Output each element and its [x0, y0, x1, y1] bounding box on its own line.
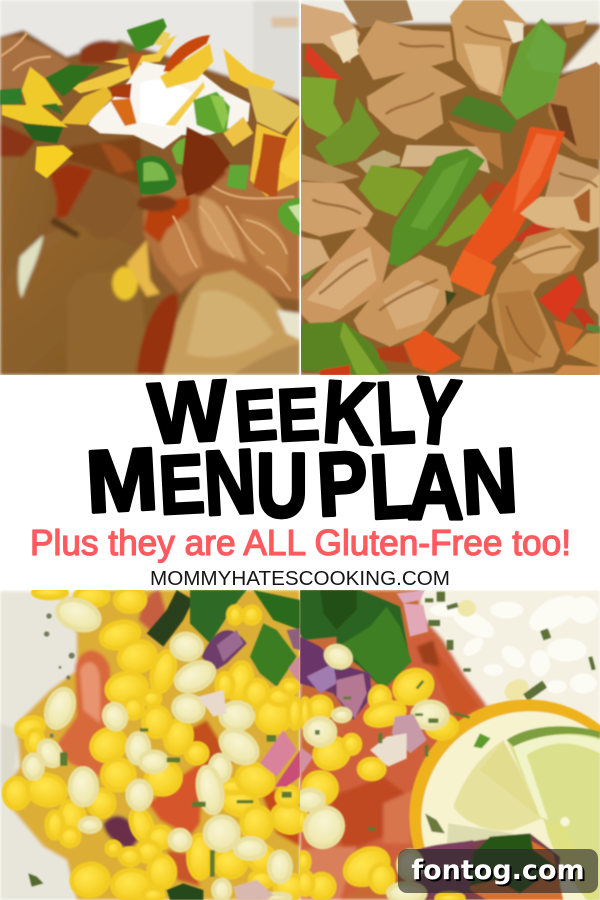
title: weekly menu plan: E	[275, 372, 321, 457]
title: weekly menu plan: U	[256, 436, 308, 536]
title: weekly menu plan: L	[374, 364, 417, 464]
photo: chicken fajitas with peppers	[300, 0, 600, 375]
title: weekly menu plan: E	[156, 438, 207, 533]
title: weekly menu plan: M	[84, 430, 160, 532]
photo: baked potato with pulled pork	[0, 0, 300, 375]
title: weekly menu plan: A	[407, 437, 464, 539]
website address: MOMMYHATESCOOKING.COM	[150, 567, 450, 590]
title: weekly menu plan: N	[201, 431, 259, 535]
title: weekly menu plan	[84, 358, 520, 539]
title: weekly menu plan: K	[320, 363, 378, 464]
title: weekly menu plan: E	[232, 375, 280, 457]
white title band	[0, 375, 600, 590]
watermark badge	[398, 849, 598, 893]
watermark badge: fontog.com	[411, 855, 585, 886]
photo: salmon, rice and citrus, right half	[297, 588, 600, 900]
title: weekly menu plan: W	[146, 361, 230, 462]
title: weekly menu plan: L	[367, 436, 415, 539]
title: weekly menu plan: P	[314, 432, 370, 535]
subtitle: Plus they are ALL Gluten-Free too!	[30, 522, 571, 563]
photo: salmon with corn salsa, left half	[0, 587, 309, 900]
title: weekly menu plan: Y	[408, 358, 465, 466]
title: weekly menu plan: N	[459, 429, 520, 533]
